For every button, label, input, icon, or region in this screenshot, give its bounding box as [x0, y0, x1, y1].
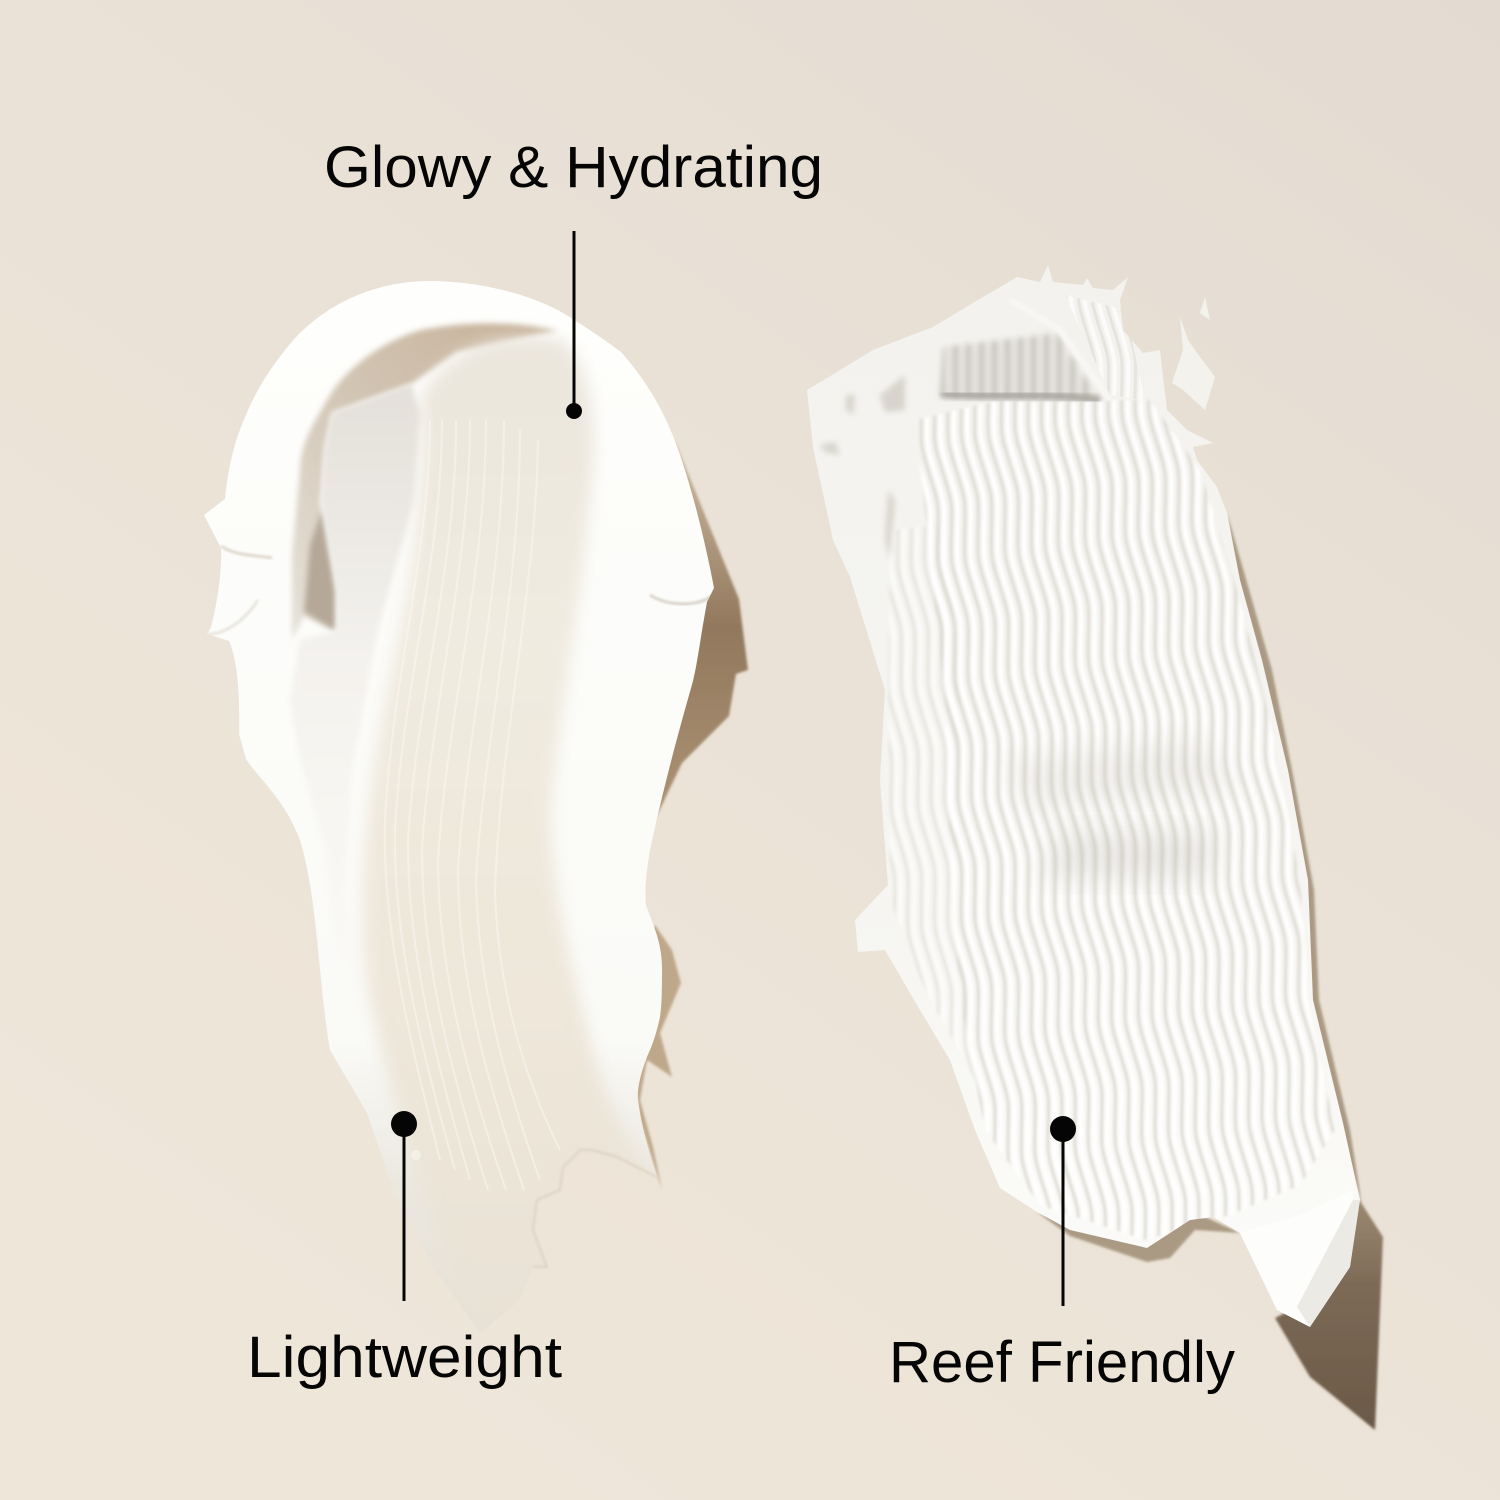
chipped corner tip — [1283, 1313, 1310, 1327]
grey side pane — [292, 386, 421, 770]
right swatch bottom shadow — [1275, 1190, 1383, 1430]
right swatch interior — [820, 295, 1360, 1327]
marker dot — [566, 403, 582, 419]
left swatch lower shadow — [630, 925, 681, 1190]
left swatch shadow — [620, 441, 748, 905]
jagged lower edge — [533, 1150, 657, 1267]
marker dot — [391, 1111, 417, 1137]
left swatch interior — [208, 320, 710, 1212]
leader line — [1062, 1129, 1064, 1306]
fleck near dot — [411, 1150, 421, 1160]
ridges lower-left — [888, 525, 975, 1080]
right textured swatch — [807, 265, 1383, 1430]
comb shadow base — [942, 394, 1100, 400]
left cream swatch — [204, 281, 748, 1340]
callout: Glowy & Hydrating — [324, 135, 823, 419]
right swatch body — [807, 265, 1360, 1327]
comb diagonal highlight — [1058, 332, 1110, 401]
callout: Lightweight — [247, 1111, 562, 1390]
leader line — [572, 231, 576, 410]
marker dot — [1050, 1116, 1076, 1142]
comb shadow — [940, 333, 1100, 400]
chipped corner facet — [1297, 1200, 1360, 1327]
right swatch edge shadow — [1037, 513, 1362, 1262]
shaded bands — [1016, 743, 1222, 806]
ridges — [915, 400, 1335, 1240]
heading: Lightweight — [247, 1325, 562, 1390]
brush lines — [385, 420, 560, 1190]
leader line — [402, 1124, 406, 1301]
left creases — [221, 546, 272, 558]
callout: Reef Friendly — [889, 1116, 1235, 1395]
brown inner fold — [292, 323, 557, 640]
right crease — [650, 595, 712, 604]
mottled spots — [820, 375, 905, 560]
cream centre — [358, 330, 637, 1212]
heading: Glowy & Hydrating — [324, 135, 823, 200]
left swatch body — [204, 281, 714, 1333]
right swatch flecks — [1172, 297, 1215, 410]
ridges top right — [1065, 295, 1145, 400]
heading: Reef Friendly — [889, 1330, 1235, 1395]
darker wedge — [304, 510, 336, 631]
